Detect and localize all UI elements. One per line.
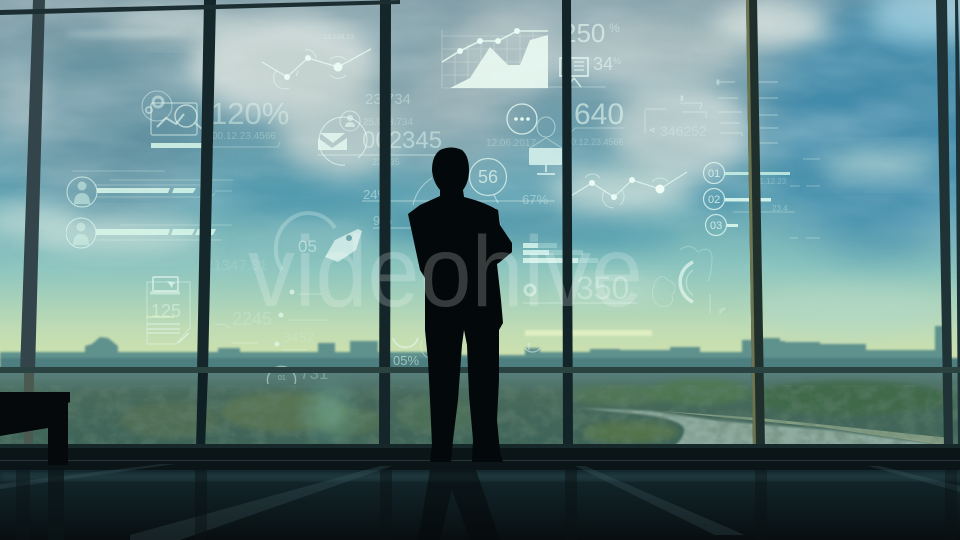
numbered bars 01 02 03: 01.12.23 [755,177,787,186]
businessman silhouette [408,148,512,462]
small data list with 346252 [645,79,778,143]
numbered bars 01 02 03: 02 [708,194,720,206]
videohive watermark: videohive [248,216,643,328]
faint numbers and dotted lists: 01 [278,375,286,382]
ring and blob icon [652,246,725,314]
envelope with 002345 counter: 23.735 [372,157,400,167]
faint numbers and dotted lists: 2245 [232,309,272,329]
circle 56 with 67% [470,158,548,207]
faint numbers and dotted lists [205,257,328,384]
numbered bars 01 02 03: 03 [710,220,722,232]
rocket and 05 dial [276,213,362,270]
circle 56 with 67%: 56 [478,167,498,187]
bench at left [0,392,70,540]
envelope with 002345 counter [318,91,445,167]
05 percent gauge [393,338,540,368]
numbered bars 01 02 03 [704,159,820,238]
envelope with 002345 counter: 002345 [362,127,442,154]
percentage labels with ring: 9% [373,213,392,228]
holographic data overlay [66,18,820,384]
small data list with 346252: 346252 [660,123,707,139]
reflection of businessman on floor [418,470,500,540]
envelope with 002345 counter: 23.734 [365,91,411,108]
640 counter [562,98,625,147]
250 percent and presentation icon: % [609,21,620,35]
line chart upper left: 23.134.13 [323,34,354,41]
sky background [0,0,960,375]
circle 56 with 67%: 67% [522,192,548,207]
clouds [0,0,960,335]
numbered bars 01 02 03: 01 [708,168,720,180]
stacked bars and gear with 350 [523,243,652,336]
area chart [442,28,548,88]
250 percent and presentation icon: 250 [562,18,605,48]
numbered bars 01 02 03: 23.4 [772,204,788,213]
rocket and 05 dial: 05 [298,237,317,256]
250 percent and presentation icon: % [613,56,621,66]
faint numbers and dotted lists: 731 [300,364,328,383]
document with laptop and 125 [147,277,190,344]
gears and magnifier icon with 120%: 120% [210,96,289,131]
floor and sill [0,448,960,540]
250 percent and presentation icon [540,18,621,87]
gears and magnifier icon with 120%: 00.12.23.4566 [212,131,276,142]
small data list with 346252: ▮ [716,79,720,86]
line chart center right [564,172,687,208]
document with laptop and 125: 125 [151,301,181,321]
05 percent gauge: 05% [393,353,419,368]
percentage labels with ring [362,178,555,230]
faint numbers and dotted lists: 21347.31 [205,257,268,274]
line chart upper left [262,34,371,89]
stacked bars and gear with 350: 350 [576,270,629,306]
faint numbers and dotted lists: 3452 [283,329,314,345]
trees and river in the lower glass [0,372,960,450]
person list widgets [66,171,233,248]
small data list with 346252: ▮ [680,95,684,102]
640 counter: 640 [574,98,624,131]
chat and monitor operator icon [486,104,562,174]
lens flares [65,0,960,436]
640 counter: 0.12.23.4566 [571,137,624,147]
envelope with 002345 counter: 25.923.734 [363,117,413,128]
250 percent and presentation icon: 34 [593,54,613,74]
percentage labels with ring: 24% [363,187,389,202]
city skyline [0,326,960,372]
chat and monitor operator icon: 12.06.2017 [486,138,536,149]
gears and magnifier icon with 120% [142,91,289,148]
